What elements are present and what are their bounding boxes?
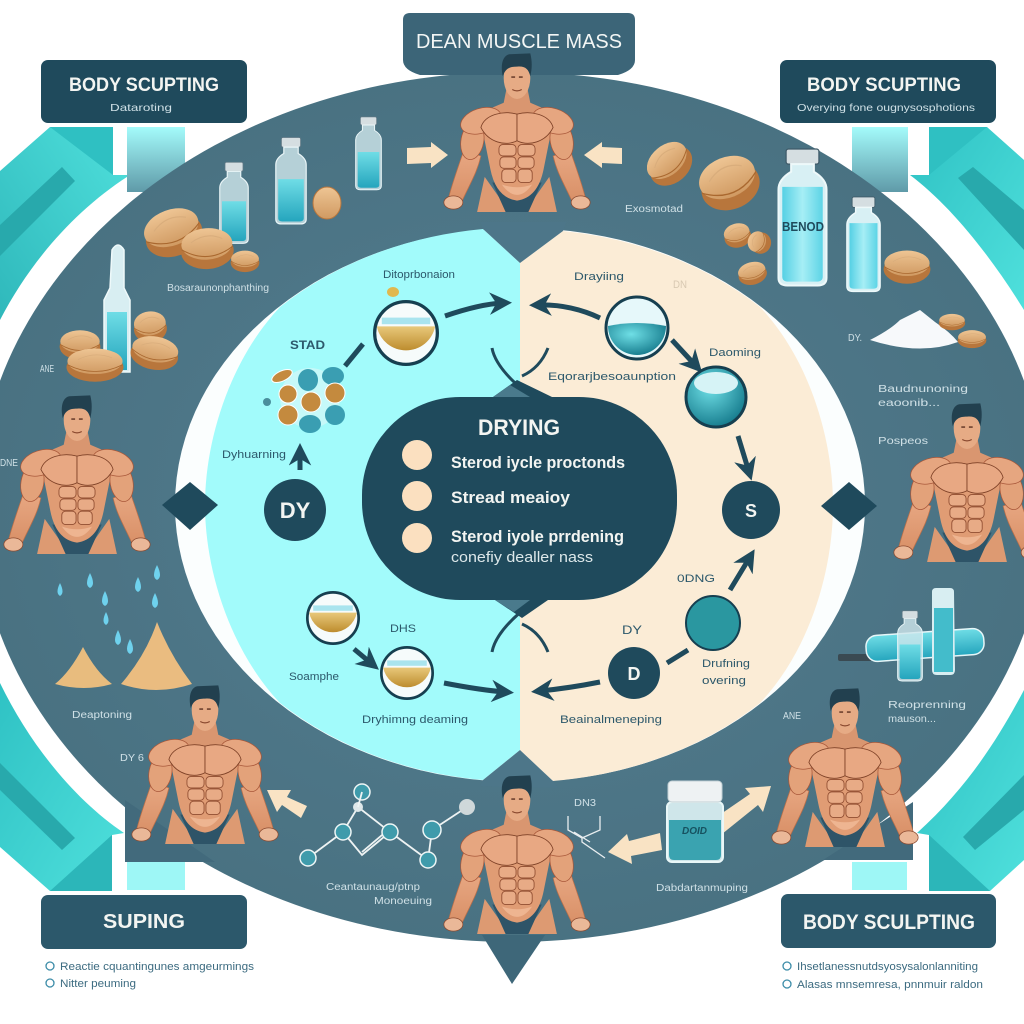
small captions on the band: DNE	[0, 458, 18, 469]
node: S circle: S	[745, 501, 757, 521]
inner captions: DN	[673, 279, 687, 291]
small captions on the band: eaoonib...	[878, 398, 940, 409]
jar	[667, 781, 723, 862]
node: gold bowl bottom	[381, 647, 433, 699]
notch: top	[480, 222, 566, 263]
label box: top right: BODY SCUPTING	[807, 75, 961, 96]
title box: DEAN MUSCLE MASS	[416, 31, 622, 53]
node: gold bowl top	[375, 287, 437, 364]
bullet list: bottom right: Alasas mnsemresa, pnnmuir raldon	[797, 979, 983, 991]
small captions on the band: mauson...	[888, 714, 936, 725]
inner captions: Drufning	[702, 658, 750, 670]
inner captions: overing	[702, 675, 746, 687]
central dark triangles	[493, 380, 552, 618]
label box: bottom right: BODY SCULPTING	[803, 911, 975, 934]
inner captions	[222, 269, 761, 726]
bullet 3	[402, 523, 624, 566]
small captions on the band: Dabdartanmuping	[656, 883, 748, 894]
label box: top right: Overying fone ougnysosphotions	[797, 102, 975, 114]
panel: inner white ring	[175, 228, 865, 782]
bullet 2: Stread meaioy	[451, 488, 571, 507]
node: DY circle	[264, 479, 326, 541]
vials and pills: top left	[138, 117, 381, 272]
bullet list: bottom left	[46, 961, 255, 990]
vials and pills: top right	[639, 134, 930, 291]
teal chevron: bottom right	[852, 690, 1024, 891]
small captions on the band: Ceantaunaug/ptnp	[326, 882, 420, 893]
inner captions: Daoming	[709, 347, 761, 359]
figure: bottom left	[132, 685, 278, 844]
small captions on the band: DY 6	[120, 753, 144, 764]
inner captions: Dyhuarning	[222, 449, 286, 461]
inner captions: Beainalmeneping	[560, 714, 662, 726]
small captions on the band: Bosaraunonphanthing	[167, 283, 269, 294]
small captions on the band: Monoeuing	[374, 896, 432, 907]
teal chevron: bottom left	[0, 683, 185, 891]
label box: bottom right	[781, 894, 996, 948]
bullet 3: Sterod iyole prrdening	[451, 527, 624, 546]
syringe and vial: right	[838, 588, 985, 681]
bullet list: bottom left: Reactie cquantingunes amgeurmings	[60, 961, 255, 973]
node: D circle: D	[628, 664, 640, 684]
label box: top left	[41, 60, 247, 123]
jar: DOID	[682, 826, 707, 837]
node: bead cluster	[263, 367, 345, 433]
node: gold bowl lower left	[307, 592, 359, 644]
small captions on the band: Deaptoning	[72, 710, 132, 721]
label box: bottom left: SUPING	[103, 911, 185, 933]
teal chevron: top right	[852, 127, 1024, 310]
figure: bottom right	[772, 688, 918, 847]
diamond: right	[821, 482, 877, 530]
bullet list: bottom right: Ihsetlanessnutdsyosysalonlanniting	[797, 961, 978, 973]
figure: left	[4, 395, 150, 554]
vials and pills: mid left	[60, 245, 181, 382]
bullet 2	[402, 481, 571, 511]
molecule right	[568, 816, 605, 858]
bullet list: bottom right	[783, 961, 983, 991]
bullet list: bottom left: Nitter peuming	[60, 978, 136, 990]
cream arrows	[267, 142, 771, 864]
inner captions: Drayiing	[574, 271, 624, 283]
bullet 1	[402, 440, 625, 472]
bullet 1: Sterod iycle proctonds	[451, 453, 625, 472]
small captions on the band	[0, 204, 968, 907]
diamond: left	[162, 482, 218, 530]
cycle arrows	[300, 303, 750, 692]
figure: bottom centre	[444, 775, 590, 934]
inner captions: 0DNG	[677, 573, 715, 585]
label box: top left: Dataroting	[110, 102, 172, 114]
small captions on the band: ANE	[40, 364, 54, 375]
inner captions: Ditoprbonaion	[383, 269, 455, 281]
node: teal bowl top right	[606, 297, 668, 359]
small captions on the band: Exosmotad	[625, 204, 683, 215]
figure: right	[894, 403, 1024, 562]
node: teal sphere right	[686, 367, 746, 427]
small captions on the band: DN3	[574, 798, 596, 809]
small captions on the band: DY.	[848, 333, 862, 344]
powder and tablets: right	[870, 310, 986, 349]
small captions on the band: ANE	[783, 711, 801, 722]
node: teal textured sphere	[686, 596, 740, 650]
label box: top right	[780, 60, 996, 123]
label box: bottom left	[41, 895, 247, 949]
label box: top left: BODY SCUPTING	[69, 75, 219, 96]
small captions on the band: Pospeos	[878, 436, 928, 447]
small captions on the band: Baudnunoning	[878, 384, 968, 395]
figure: top	[444, 53, 590, 212]
inner captions: STAD	[290, 338, 325, 352]
small captions on the band: Reoprenning	[888, 700, 966, 711]
central hook curves	[492, 348, 548, 652]
panel heading: DRYING	[478, 415, 560, 440]
molecule	[300, 784, 475, 868]
node: DY circle: DY	[280, 498, 311, 523]
inner captions: DHS	[390, 623, 416, 635]
node: D circle	[608, 647, 660, 699]
notch: bottom	[480, 750, 558, 788]
node: S circle	[722, 481, 780, 539]
teal chevron: top left	[0, 127, 185, 320]
inner captions: Soamphe	[289, 671, 339, 683]
vials and pills: top right: BENOD	[782, 219, 824, 234]
panel: inner left cyan half	[205, 229, 520, 780]
inner captions: DY	[622, 623, 642, 637]
bullet 3: conefiy dealler nass	[451, 549, 593, 566]
panel: inner right cream half	[520, 231, 833, 781]
central dark panel	[362, 397, 677, 600]
droplets and sand: left	[55, 565, 192, 690]
title box	[403, 13, 635, 75]
inner captions: Eqorarjbesoaunption	[548, 371, 676, 383]
inner captions: Dryhimng deaming	[362, 714, 468, 726]
